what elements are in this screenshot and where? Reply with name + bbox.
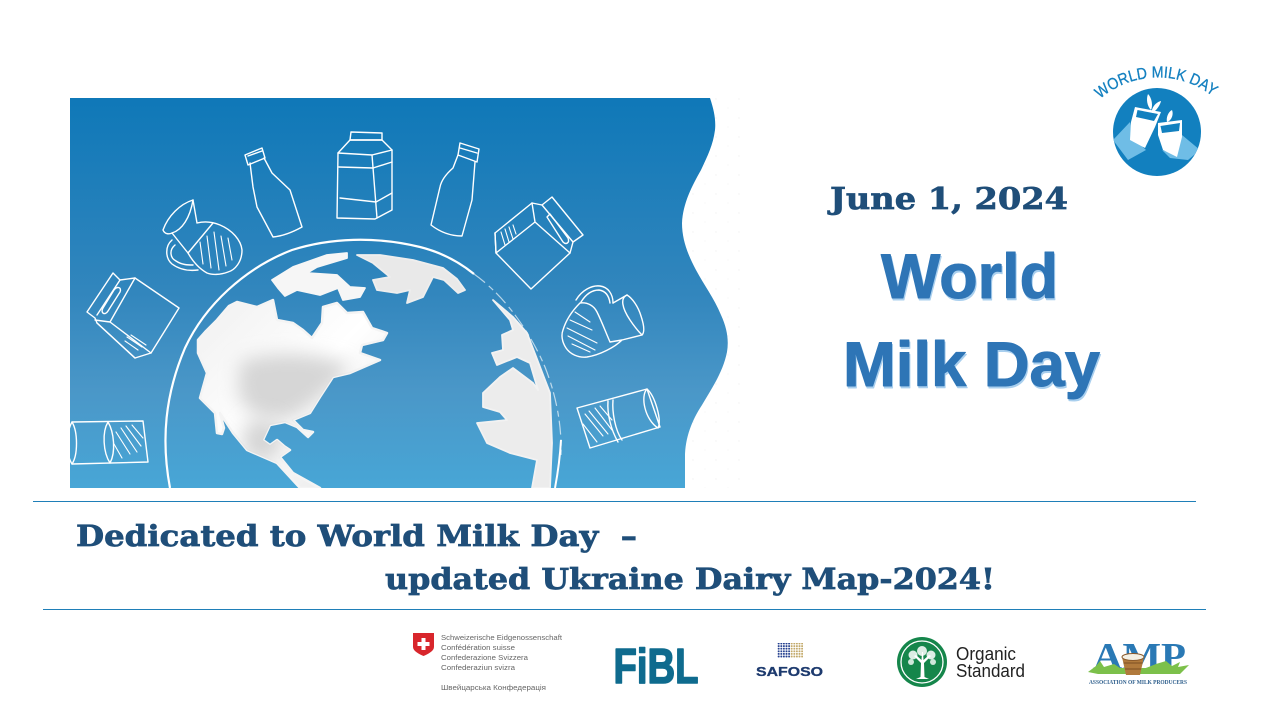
- illustration panel: milk globe: [68, 98, 750, 488]
- globe outline: [165, 240, 561, 488]
- blue wavy background: [70, 98, 750, 488]
- Ukrainian name: Швейцарська Конфедерація: [441, 683, 546, 692]
- milk bucket: [1122, 654, 1144, 675]
- logo: World Milk Day: [1093, 66, 1220, 176]
- wordmark: SAFOSO: [756, 665, 823, 679]
- icon: can right: [577, 389, 660, 448]
- icon: bottle left: [245, 148, 302, 237]
- dedication line one: Dedicated to World Milk Day –: [76, 519, 637, 553]
- icon: jug left: [163, 200, 242, 274]
- continent: Arctic Eurasia: [357, 255, 465, 303]
- French name: Confédération suisse: [441, 643, 515, 652]
- icon: jug right: [562, 286, 644, 357]
- German name: Schweizerische Eidgenossenschaft: [441, 633, 563, 642]
- date: June 1, 2024: [827, 182, 1068, 217]
- green roundel: [897, 637, 947, 687]
- wordmark line one: Organic: [956, 644, 1016, 664]
- logo circle: [1113, 88, 1201, 176]
- icon: carton centre: [337, 132, 392, 219]
- speckled paper strip beside wave: [680, 98, 747, 488]
- continent: Greenland north: [272, 253, 365, 300]
- cross: [418, 638, 430, 650]
- logo lettering: WORLD MILK DAY: [1093, 66, 1220, 98]
- shield: [413, 633, 434, 656]
- logo: Organic Standard: [897, 637, 1025, 687]
- icon: bottle right: [431, 143, 479, 236]
- icon: carton left: [87, 273, 179, 358]
- logo hands and glasses: [1113, 94, 1200, 160]
- dedication line two: updated Ukraine Dairy Map-2024!: [385, 562, 995, 596]
- dot grid: [777, 643, 803, 658]
- logo: FiBL: FiBL: [614, 640, 698, 694]
- roundel ring: [901, 641, 943, 683]
- caption: ASSOCIATION OF MILK PRODUCERS: [1089, 679, 1187, 686]
- Romansh name: Confederaziun svizra: [441, 663, 516, 672]
- tree: [908, 646, 936, 679]
- title: World: World: [881, 242, 1058, 312]
- logo: Association of Milk Producers: [1088, 636, 1189, 686]
- icon: carton right: [495, 197, 583, 289]
- grass: [1088, 661, 1189, 674]
- AMP letters: AMP: [1093, 636, 1186, 678]
- globe with milk continents: [68, 132, 660, 488]
- continent: North America: [198, 300, 387, 488]
- Italian name: Confederazione Svizzera: [441, 653, 529, 662]
- title: Milk Day: Milk Day: [843, 330, 1100, 400]
- divider: upper: [33, 501, 1196, 502]
- icon: can left: [68, 421, 148, 464]
- logo: SAFOSO: [756, 643, 823, 679]
- wordmark line two: Standard: [956, 661, 1025, 681]
- continent: Africa and Europe edge: [477, 300, 552, 488]
- divider: lower: [43, 609, 1206, 610]
- logo: Swiss Confederation: [413, 633, 563, 692]
